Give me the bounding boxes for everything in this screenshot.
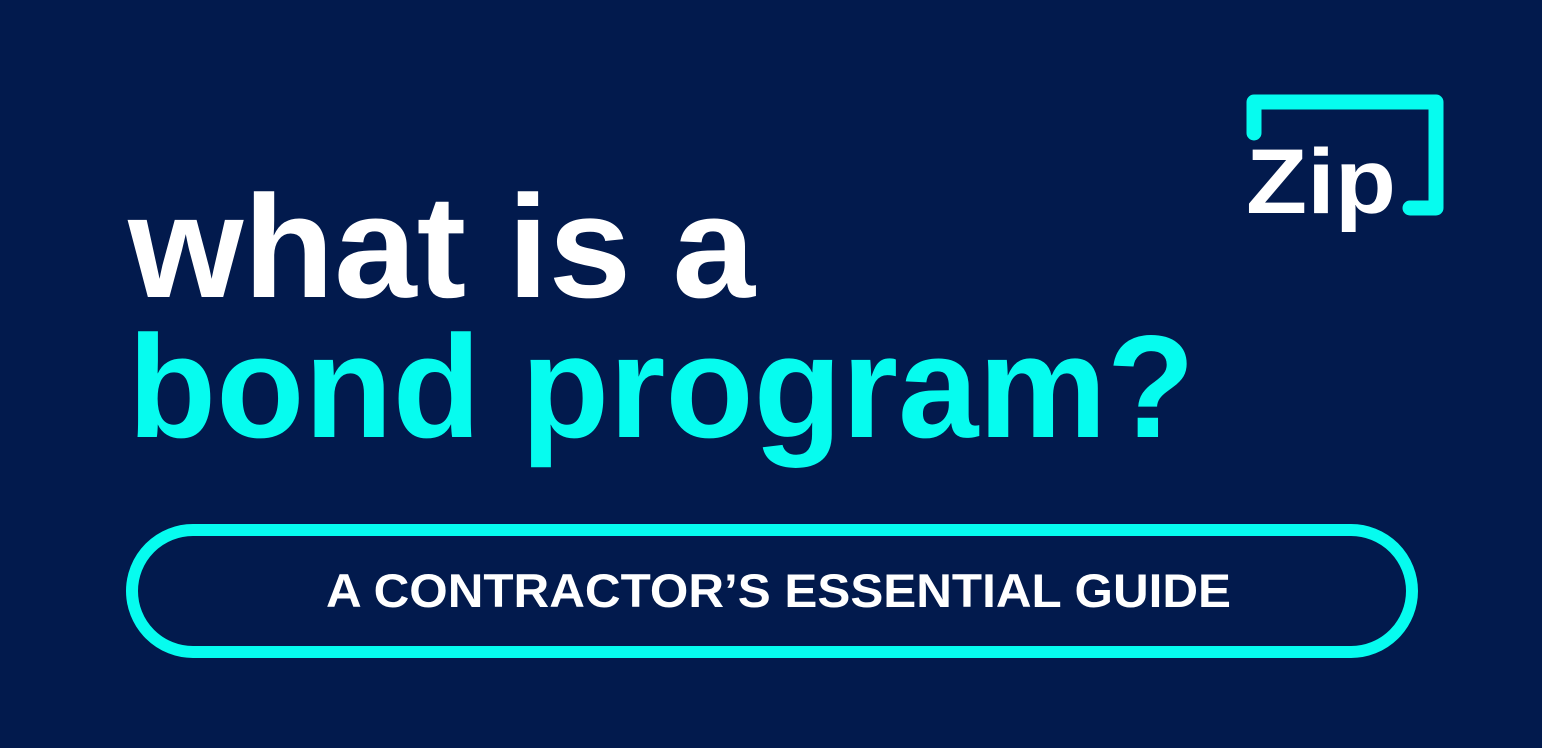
logo bracket xyxy=(1254,102,1436,208)
title line 2: bond program? xyxy=(128,305,1195,468)
title line 1: what is a xyxy=(127,165,757,328)
subtitle text: A CONTRACTOR’S ESSENTIAL GUIDE xyxy=(326,564,1231,617)
subtitle pill xyxy=(132,530,1412,652)
logo: Zip xyxy=(1246,102,1436,233)
logo text: Zip xyxy=(1246,131,1396,233)
